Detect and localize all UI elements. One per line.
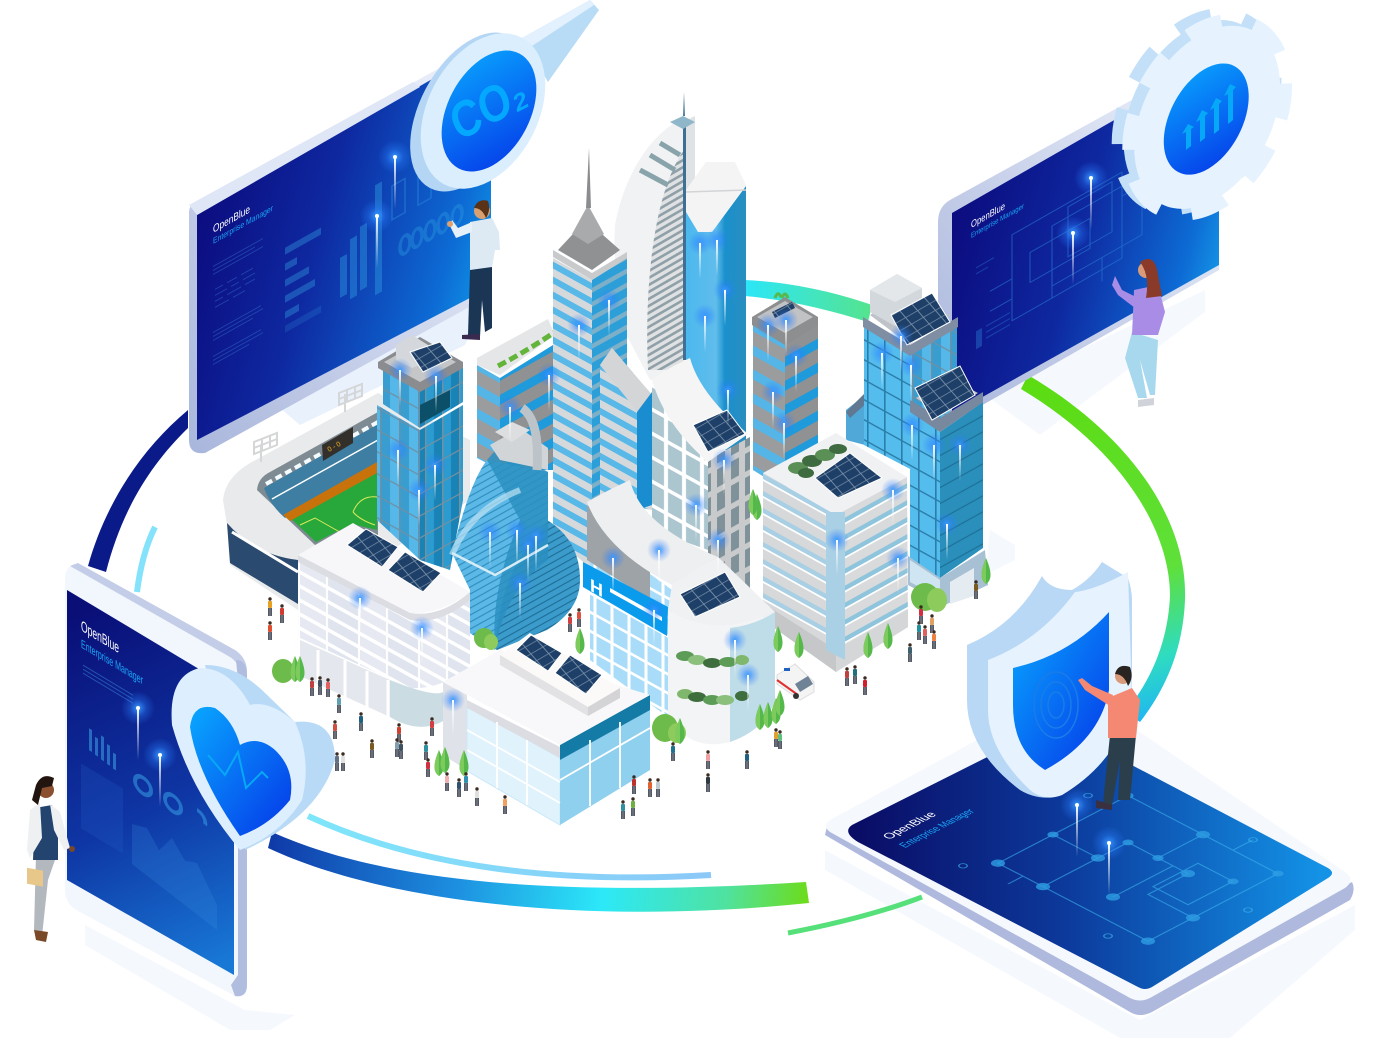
stadium: scoreboard: 0 - 0 xyxy=(327,441,342,454)
tower base xyxy=(908,550,988,605)
dashboard: horizontal bars xyxy=(285,228,321,333)
person: woman at energy screen xyxy=(1112,259,1165,407)
solar array xyxy=(915,366,975,420)
dashboard: list lines xyxy=(213,238,263,365)
solar array 1 xyxy=(347,529,398,567)
dashboard: legend xyxy=(976,248,1010,349)
big blue left tower xyxy=(377,335,463,570)
ring: thin light arcs xyxy=(137,527,155,592)
dashboard: area chart xyxy=(132,814,217,930)
person: man at CO2 screen xyxy=(447,200,500,340)
low glass building xyxy=(443,633,650,825)
heading: Enterprise Manager: Enterprise Manager xyxy=(213,203,273,246)
ring: bottom gradient arc xyxy=(268,832,809,912)
lower right blue tower xyxy=(908,366,988,605)
apartment building xyxy=(763,433,908,672)
hospital xyxy=(583,480,718,720)
curved white tower xyxy=(614,92,695,380)
city xyxy=(121,92,1126,895)
person: man at shield xyxy=(1078,666,1140,810)
solar on roof xyxy=(772,302,795,318)
right tall blue tower xyxy=(846,274,958,470)
roof platform xyxy=(500,633,620,707)
spire tower xyxy=(553,148,627,570)
solar array xyxy=(680,572,740,617)
pedestrians xyxy=(268,580,978,819)
dashboard: circuit network xyxy=(983,785,1298,949)
rooftop unit xyxy=(870,274,922,326)
solar array 1 xyxy=(516,635,562,671)
dashboard: outline nodes xyxy=(952,772,1324,965)
dashboard: circuit nodes xyxy=(988,790,1288,946)
heading: Enterprise Manager: Enterprise Manager xyxy=(81,636,143,688)
heading: OpenBlue: OpenBlue xyxy=(213,202,250,236)
rooftop unit xyxy=(396,335,428,368)
ambulance xyxy=(777,664,814,700)
grey striped mid tower xyxy=(477,319,555,470)
panel: energy dashboard screen xyxy=(938,60,1219,420)
up arrows xyxy=(1182,84,1236,150)
garden ledges xyxy=(676,651,749,705)
solar array 2 xyxy=(388,552,441,592)
dashboard: table xyxy=(81,763,123,854)
heading: OpenBlue: OpenBlue xyxy=(879,810,940,841)
dome glass tower xyxy=(452,408,580,650)
CO2 label: CO₂ xyxy=(439,64,536,151)
crystal blue tower xyxy=(686,162,746,450)
ground shadows xyxy=(85,290,1355,1038)
data light beams xyxy=(121,140,1126,895)
fingerprint xyxy=(1034,672,1078,738)
heading: Enterprise Manager: Enterprise Manager xyxy=(897,807,978,850)
panel: left tablet health dashboard xyxy=(65,563,247,996)
solar array xyxy=(815,453,882,498)
dashboard: circuit plan xyxy=(990,155,1152,345)
stadium: light towers xyxy=(254,384,362,462)
solar array xyxy=(891,293,950,345)
connecting rings xyxy=(88,280,1185,933)
ring: teal top arc xyxy=(745,280,872,322)
dashboard: gauges xyxy=(400,204,462,256)
wedge roof building xyxy=(600,348,652,510)
top crown xyxy=(490,428,548,470)
dashboard: bar chart xyxy=(340,181,382,315)
dashboard: files xyxy=(392,164,431,220)
panel: bottom-right tablet security dashboard xyxy=(825,693,1354,1015)
panel: CO2 dashboard screen xyxy=(189,45,491,453)
solar array 2 xyxy=(555,655,602,694)
hospital sign: H xyxy=(590,576,603,602)
icon: performance gear xyxy=(1094,0,1310,234)
solar array xyxy=(410,342,452,372)
dashboard: donuts xyxy=(135,773,205,831)
round garden building xyxy=(668,557,775,744)
heading: Enterprise Manager: Enterprise Manager xyxy=(971,201,1024,240)
ring: navy arc xyxy=(88,410,188,572)
heartbeat line xyxy=(208,752,268,788)
icon: health heart xyxy=(172,665,335,850)
stadium: orange track xyxy=(283,462,377,521)
roof trees xyxy=(788,444,847,478)
trees and landscaping xyxy=(272,489,990,776)
dashboard: lines xyxy=(83,665,133,704)
small striped tower xyxy=(752,294,818,490)
icon: CO2 lens xyxy=(385,0,599,211)
ring: green right arc xyxy=(1021,375,1185,722)
stadium: field xyxy=(290,467,377,542)
curved white building xyxy=(298,523,470,727)
dashboard: mini bars xyxy=(89,728,116,770)
icon: security shield xyxy=(967,562,1132,798)
stadium: scoreboard xyxy=(322,427,353,461)
hospital sign xyxy=(583,562,668,636)
person: woman at left tablet xyxy=(27,776,75,942)
heading: OpenBlue: OpenBlue xyxy=(971,200,1005,231)
stadium xyxy=(223,384,470,610)
glass mid building xyxy=(652,358,750,590)
heading: OpenBlue: OpenBlue xyxy=(81,618,119,657)
solar array xyxy=(693,410,745,452)
ring: thin green arc xyxy=(788,897,922,933)
